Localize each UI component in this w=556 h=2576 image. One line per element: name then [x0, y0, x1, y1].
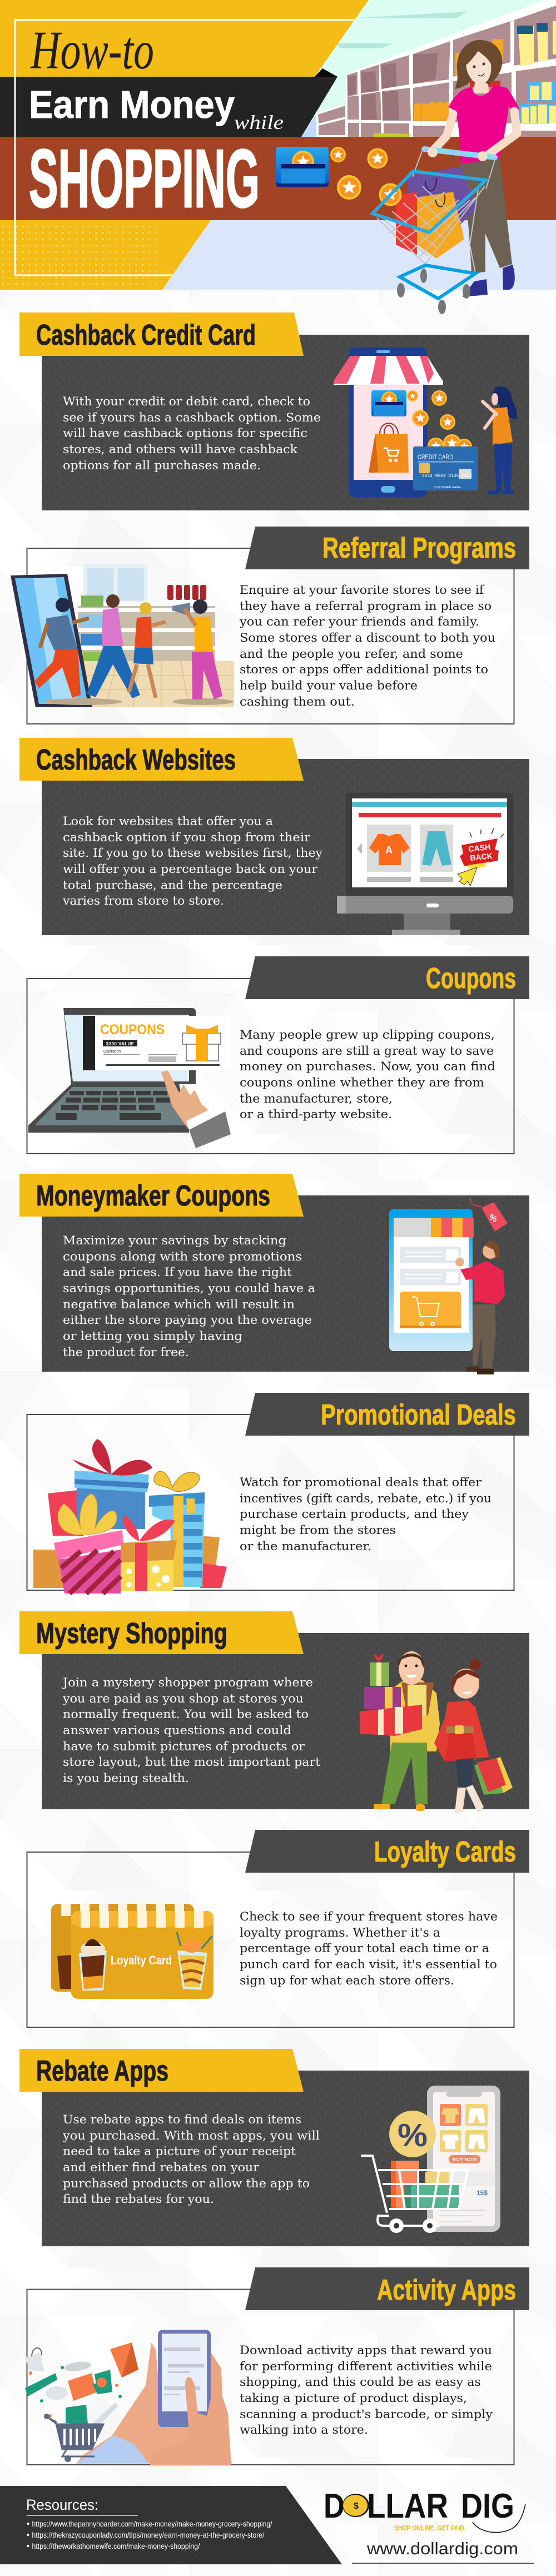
heading: mystery shopping	[19, 1611, 304, 1654]
panel: cashback websites	[19, 738, 529, 935]
text: coupons: money on purchases. Now, you can find	[240, 1060, 495, 1073]
illustration: monitor with cashback page	[337, 793, 513, 935]
text: mystery shopping: answer various questions and could	[63, 1724, 291, 1737]
illustration: phone and cart with percent: %	[398, 2117, 428, 2153]
panel: activity apps	[25, 2267, 529, 2465]
heading: cashback websites: Cashback Websites	[36, 744, 236, 776]
text: activity apps: scanning a product's barcode, or simply	[240, 2408, 493, 2421]
illustration: phone store with credit card	[334, 348, 517, 497]
panel: referral programs	[11, 527, 529, 724]
white frame line	[15, 20, 355, 275]
heading: cashback credit card: Cashback Credit Card	[36, 319, 256, 351]
illustration: loyalty cards	[51, 1904, 214, 1999]
heading: promotional deals	[245, 1393, 529, 1436]
text: mystery shopping: store layout, but the most important part	[63, 1755, 321, 1769]
illustration: phone store with credit card: CUSTOMER NAME	[434, 486, 461, 489]
text: promotional deals: Watch for promotional deals that offer	[240, 1476, 482, 1489]
text: cashback websites	[62, 815, 322, 907]
heading: coupons	[245, 956, 529, 999]
illustration: monitor with cashback page: BACK	[470, 851, 493, 862]
illustration: gift boxes	[33, 1439, 227, 1594]
text: mystery shopping	[62, 1676, 321, 1785]
text: cashback credit card: With your credit or debit card, check to	[63, 395, 310, 408]
text: referral programs: they have a referral program in place so	[240, 599, 492, 613]
heading: moneymaker coupons: Moneymaker Coupons	[36, 1180, 270, 1212]
title: SHOPPING	[29, 133, 260, 225]
text: loyalty cards: percentage off your total each time or a	[240, 1942, 489, 1955]
resource links: https://thekrazycouponlady.com/tips/money/earn-money-at-the-grocery-store/	[32, 2531, 265, 2539]
logo: Dollar Dig: D	[324, 2487, 345, 2525]
text: cashback websites: will offer you a percentage back on your	[63, 862, 318, 876]
text: moneymaker coupons: coupons along with store promotions	[63, 1250, 302, 1263]
text: cashback websites: Look for websites that offer you a	[63, 815, 273, 828]
shopping bags	[379, 167, 477, 259]
text: cashback credit card: options for all purchases made.	[63, 459, 261, 472]
icon: blue card with coins	[276, 147, 388, 200]
woman with shopping cart	[373, 40, 519, 314]
illustration: phone and cart with percent: BUY NOW	[453, 2157, 476, 2162]
text: referral programs	[239, 583, 495, 708]
website url: www.dollardig.com	[366, 2539, 518, 2558]
black band	[0, 68, 337, 137]
text: activity apps: for performing different activities while	[240, 2360, 492, 2373]
text: coupons: Many people grew up clipping coupons,	[240, 1028, 495, 1041]
text: referral programs: Enquire at your favorite stores to see if	[240, 583, 485, 597]
text: loyalty cards	[240, 1910, 498, 1987]
text: referral programs: and the people you refer, and some	[240, 647, 463, 661]
illustration: shoppers leaving phone	[11, 564, 234, 707]
text: loyalty cards: Check to see if your frequent stores have	[240, 1910, 498, 1923]
dotted yellow block	[0, 220, 211, 290]
header banner	[0, 0, 556, 314]
panel: loyalty cards	[27, 1830, 529, 2027]
title	[29, 21, 284, 225]
text: rebate apps: and either find rebates on your	[63, 2161, 260, 2174]
text: promotional deals: purchase certain products, and they	[240, 1507, 469, 1521]
illustration: hands with phone and shopping items	[25, 2330, 232, 2465]
text: coupons	[240, 1028, 495, 1121]
text: cashback websites: total purchase, and the percentage	[63, 878, 282, 892]
logo: Dollar Dig	[324, 2487, 525, 2533]
text: loyalty cards: sign up for what each store offers.	[240, 1974, 454, 1987]
illustration: phone store with credit card: 2514 9563 2145 2414	[422, 474, 472, 479]
text: activity apps: taking a picture of product displays,	[240, 2391, 467, 2405]
text: promotional deals	[240, 1476, 492, 1553]
text: moneymaker coupons: and sale prices. If you have the right	[63, 1265, 292, 1279]
text: coupons: coupons online whether they are from	[240, 1076, 484, 1089]
title: while	[234, 111, 284, 133]
store scene	[300, 0, 556, 137]
title: Earn Money	[29, 83, 235, 126]
illustration: phone and cart with percent: 15$	[476, 2189, 488, 2197]
text: activity apps: shopping, and this could be as easy as	[240, 2375, 481, 2389]
text: loyalty cards: loyalty programs. Whether it's a	[240, 1926, 440, 1939]
illustration: laptop with coupon: $300 VALUE	[106, 1041, 135, 1046]
logo: Dollar Dig: LLAR	[367, 2487, 448, 2525]
floor	[162, 220, 556, 290]
heading: cashback credit card	[19, 312, 304, 356]
text: rebate apps: find the rebates for you.	[63, 2192, 214, 2206]
illustration: laptop with coupon	[28, 1008, 231, 1148]
text: promotional deals: or the manufacturer.	[240, 1540, 371, 1553]
panel: cashback credit card	[19, 312, 529, 510]
resource links: https://theworkathomewife.com/make-money-shopping/	[32, 2542, 200, 2550]
logo: Dollar Dig: SHOP ONLINE. GET PAID.	[394, 2524, 466, 2532]
resource links: https://www.thepennyhoarder.com/make-money/make-money-grocery-shopping/	[32, 2520, 272, 2528]
heading: coupons: Coupons	[426, 962, 516, 995]
heading: activity apps: Activity Apps	[377, 2274, 516, 2306]
text: cashback credit card	[63, 395, 321, 472]
text: coupons: and coupons are still a great way to save	[240, 1044, 494, 1058]
illustration: man at phone store: %	[488, 1213, 499, 1224]
text: moneymaker coupons	[63, 1234, 315, 1359]
text: cashback websites: cashback option if you shop from their	[63, 831, 311, 844]
text: referral programs: help build your value before	[240, 679, 418, 692]
heading: activity apps	[245, 2267, 529, 2310]
panel: coupons	[27, 956, 529, 1154]
resources heading: Resources:	[26, 2496, 98, 2513]
text: moneymaker coupons: negative balance which will result in	[63, 1298, 295, 1311]
illustration: man at phone store	[389, 1198, 508, 1374]
text: mystery shopping: is you being stealth.	[63, 1771, 189, 1785]
text: cashback websites: site. If you go to these websites first, they	[63, 846, 322, 860]
brown band	[0, 137, 556, 220]
text: referral programs: Some stores offer a discount to both you	[240, 631, 495, 644]
heading: loyalty cards	[245, 1830, 529, 1873]
text: moneymaker coupons: either the store paying you the overage	[63, 1313, 312, 1327]
text: referral programs: stores or apps offer additional points to	[240, 663, 488, 676]
shopper	[434, 40, 519, 297]
text: moneymaker coupons: Maximize your savings by stacking	[63, 1234, 286, 1247]
text: cashback websites: varies from store to store.	[62, 894, 224, 907]
text: coupons: the manufacturer, store,	[240, 1092, 393, 1105]
text: cashback credit card: will have cashback options for specific	[63, 426, 307, 440]
illustration: laptop with coupon: Expiration	[103, 1050, 121, 1054]
text: activity apps: Download activity apps that reward you	[240, 2344, 492, 2357]
panel: promotional deals	[27, 1393, 529, 1594]
illustration: phone store with credit card: CREDIT CARD	[418, 453, 453, 461]
text: activity apps: walking into a store.	[240, 2423, 368, 2436]
resource links	[27, 2520, 272, 2550]
illustration: couple with gifts	[360, 1651, 513, 1814]
text: cashback credit card: stores, and others will have cashback	[63, 443, 297, 456]
text: cashback credit card: see if yours has a cashback option. Some	[63, 411, 321, 424]
text: mystery shopping: have to submit pictures of products or	[63, 1740, 305, 1753]
text: promotional deals: incentives (gift cards, rebate, etc.) if you	[240, 1492, 492, 1505]
text: mystery shopping: Join a mystery shopper program where	[62, 1676, 313, 1689]
text: rebate apps: need to take a picture of your receipt	[63, 2145, 296, 2158]
text: moneymaker coupons: or letting you simply having	[63, 1329, 242, 1343]
footer: resources	[0, 2486, 342, 2564]
heading: mystery shopping: Mystery Shopping	[36, 1617, 227, 1650]
text: moneymaker coupons: the product for free.	[63, 1346, 189, 1359]
text: rebate apps: Use rebate apps to find deals on items	[63, 2113, 301, 2126]
text: loyalty cards: punch card for each visit, it's essential to	[240, 1958, 497, 1971]
text: referral programs: cashing them out.	[240, 695, 355, 708]
text: rebate apps	[62, 2113, 320, 2206]
text: mystery shopping: you are paid as you shop at stores you	[62, 1692, 304, 1705]
shelf products	[374, 21, 556, 137]
panel: moneymaker coupons	[19, 1174, 529, 1374]
title: How-to	[29, 21, 154, 80]
top yellow band	[0, 0, 369, 77]
heading: moneymaker coupons	[19, 1174, 304, 1217]
text: referral programs: you can refer your friends and family.	[239, 615, 479, 628]
panel: rebate apps	[19, 2049, 529, 2246]
illustration: monitor with cashback page: CASH	[468, 842, 491, 853]
text: activity apps	[240, 2344, 493, 2436]
logo: Dollar Dig: $	[354, 2501, 359, 2511]
text: coupons: or a third-party website.	[240, 1108, 392, 1121]
illustration: laptop with coupon: COUPONS	[100, 1022, 165, 1038]
text: rebate apps: purchased products or allow the app to	[63, 2177, 310, 2190]
text: mystery shopping: normally frequent. You will be asked to	[63, 1708, 309, 1721]
logo: Dollar Dig: DIG	[461, 2487, 514, 2525]
heading: referral programs	[245, 527, 529, 569]
illustration: loyalty cards: Loyalty Card	[111, 1953, 172, 1967]
panel: mystery shopping	[19, 1611, 529, 1814]
illustration: phone and cart with percent	[361, 2086, 500, 2233]
heading: rebate apps: Rebate Apps	[36, 2055, 168, 2087]
cart	[373, 147, 495, 314]
illustration: monitor with cashback page: A	[385, 845, 393, 856]
text: moneymaker coupons: savings opportunities, you could have a	[63, 1282, 315, 1295]
heading: rebate apps	[19, 2049, 304, 2092]
text: rebate apps: you purchased. With most apps, you will	[62, 2129, 320, 2142]
text: promotional deals: might be from the stores	[240, 1523, 396, 1537]
